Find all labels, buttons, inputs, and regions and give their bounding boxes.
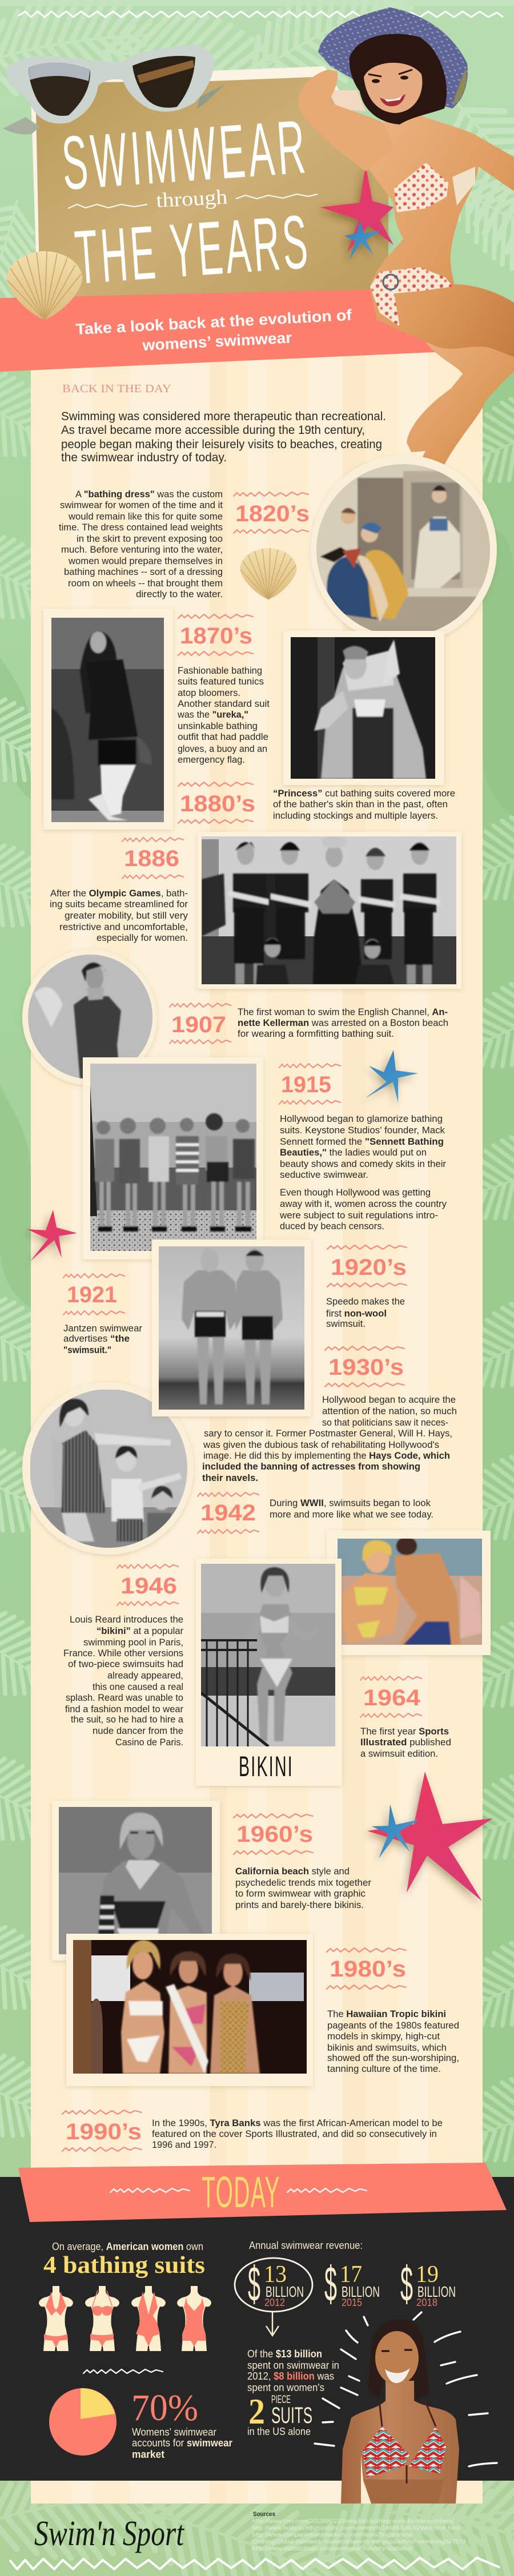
- text: 1870s: atop bloomers.: [178, 687, 240, 698]
- text: 1990s: 1996 and 1997.: [152, 2139, 216, 2150]
- icon: red starfish: [27, 1210, 77, 1261]
- text: 1980s: bikinis and swimsuits, which: [327, 2042, 447, 2053]
- stat: four bathing suits: [39, 2241, 211, 2351]
- year heading: 1942: 1942: [200, 1500, 256, 1526]
- top wavy line: [18, 11, 503, 17]
- year heading: 1960's: [234, 1814, 313, 1854]
- year heading: 1920's: 1920’s: [331, 1255, 407, 1280]
- text: 1886: especially for women.: [97, 932, 188, 943]
- intro paragraph: people began making their leisurely visits to beaches, creating: [61, 438, 382, 451]
- photo: 1886 Olympic swim team: [198, 832, 461, 989]
- year heading: 1907: 1907: [171, 1012, 226, 1037]
- text: 1820s: swimwear for women of the time and it: [60, 500, 223, 510]
- text: 1870s: outfit that had paddle: [178, 731, 268, 742]
- text: two-piece spending: 2012, $8 billion was: [247, 2370, 334, 2382]
- text: 1942: During WWII, swimsuits began to look: [270, 1498, 431, 1508]
- revenue 2018: 2018: [416, 2297, 437, 2308]
- text: 1930s: so that politicians saw it neces-: [322, 1417, 448, 1428]
- white wavy divider: [83, 2369, 163, 2373]
- text: 1820s: would remain like this for quite some: [68, 511, 223, 522]
- text: 1930s: included the banning of actresses from showing: [202, 1461, 420, 1472]
- revenue 2015: 17: [340, 2261, 362, 2288]
- text: 1960s: [235, 1866, 371, 1910]
- text: 1820s: [59, 489, 223, 599]
- year heading: 1870's: [178, 614, 253, 655]
- text: 1942: [270, 1498, 433, 1520]
- sources: http://www.companiesandmarkets.com/News/Textiles-and-: [252, 2531, 415, 2538]
- text: 1980s: pageants of the 1980s featured: [327, 2020, 459, 2031]
- text: 1820s: in the skirt to prevent exposing too: [77, 533, 223, 544]
- revenue 2018: [400, 2257, 456, 2312]
- text: 1915: Hollywood began to glamorize bathing: [280, 1113, 443, 1124]
- intro paragraph: [61, 410, 386, 464]
- text: 1880s: “Princess” cut bathing suits covered more: [273, 788, 455, 799]
- text: 1930s: attention of the nation, so much: [322, 1406, 457, 1416]
- year heading: 1980's: [327, 1948, 406, 1989]
- photo: princess cut suit: [283, 631, 444, 785]
- photo: 1980s Hawaiian Tropic pageant: [66, 1934, 313, 2086]
- year heading: 1921: [63, 1274, 125, 1315]
- revenue 2018: 19: [416, 2261, 439, 2288]
- text: 1820s: bathing machines -- sort of a dressing: [64, 566, 223, 577]
- text: 1946: France. While other versions: [63, 1648, 183, 1659]
- text: 1915: away with it, women across the country: [280, 1198, 447, 1209]
- year heading: 1990's: 1990’s: [66, 2119, 142, 2144]
- revenue 2012 with scribble circle: [235, 2257, 312, 2312]
- text: 1920s: Speedo makes the: [326, 1296, 405, 1307]
- revenue 2012 with scribble circle: $: [248, 2257, 260, 2312]
- year heading: 1880's: 1880’s: [180, 791, 255, 816]
- title: through: [155, 186, 228, 212]
- text: 1964: The first year Sports: [360, 1726, 449, 1737]
- photo: 1942 mother and children at beach: [22, 1382, 194, 1555]
- text: 1915: Even though Hollywood was getting: [280, 1187, 431, 1198]
- text: 1870s: [177, 665, 270, 765]
- photo: 1907 Annette Kellerman: [22, 949, 157, 1085]
- text: two-piece spending: 2: [248, 2391, 265, 2432]
- year heading: 1930's: 1930’s: [328, 1355, 404, 1380]
- year heading: 1942: [198, 1492, 259, 1533]
- photo: 1964 couple at beach: [327, 1531, 491, 1655]
- text: 1946: this one caused a real: [93, 1681, 183, 1692]
- revenue 2015: BILLION: [342, 2283, 380, 2300]
- section heading: back in the day: BACK IN THE DAY: [62, 383, 171, 395]
- text: 1946: already appeared,: [107, 1670, 183, 1681]
- text: 1946: Casino de Paris.: [115, 1737, 183, 1748]
- icon: bikini mannequin 1: [39, 2286, 73, 2351]
- text: 1820s: women would prepare themselves in: [68, 556, 223, 566]
- intro paragraph: As travel became more accessible during the 19th century,: [61, 424, 365, 437]
- text: 1920s: swimsuit.: [326, 1318, 366, 1329]
- sources: Clothing/Global-swimwear-market-driven-by-the-popularity-of-swimming/NI7579: [252, 2538, 465, 2545]
- icon: swimsuit mannequin 4: [177, 2286, 211, 2351]
- photo: 1915 Sennett Bathing Beauties: [83, 1057, 263, 1259]
- illustration: sun rays: [315, 2312, 497, 2466]
- text: 1886: After the Olympic Games, bath-: [50, 888, 188, 899]
- year heading: 1921: 1921: [67, 1282, 117, 1307]
- text: 1870s: emergency flag.: [178, 754, 245, 765]
- stat: 70%: accounts for swimwear: [132, 2437, 232, 2449]
- sources: [252, 2511, 465, 2552]
- text: 1980s: showed off the sun-worshiping,: [327, 2052, 459, 2063]
- revenue 2018: $: [400, 2257, 413, 2312]
- today ribbon: [18, 2163, 507, 2222]
- text: 1946: find a fashion model to wear: [65, 1704, 183, 1714]
- text: 1820s: room on wheels -- that brought them: [68, 578, 223, 589]
- stat: 70%: Womens' swimwear: [132, 2426, 216, 2438]
- photo: 1946 bikini: BIKINI: [239, 1750, 294, 1782]
- year heading: 1946: [117, 1564, 178, 1605]
- year heading: 1920's: [327, 1245, 407, 1287]
- text: 1921: Jantzen swimwear: [63, 1323, 142, 1334]
- photo: 1870s woman in bathing tunic: [43, 609, 173, 830]
- year heading: 1880's: [178, 782, 255, 823]
- icon: sunglasses: [3, 45, 224, 135]
- revenue 2012 with scribble circle: BILLION: [266, 2283, 304, 2300]
- text: 1915: suits. Keystone Studios' founder, Mack: [280, 1125, 445, 1136]
- panel: kraft paper title card: [30, 66, 388, 308]
- photo: 1946 bikini: [196, 1559, 342, 1786]
- coral header ribbon: [0, 288, 445, 372]
- year heading: 1930's: [325, 1346, 404, 1387]
- text: 1920s: first non-wool: [326, 1308, 387, 1319]
- text: 1886: greater mobility, but still very: [65, 910, 188, 921]
- stat: annual swimwear revenue: Annual swimwear revenue:: [249, 2240, 363, 2251]
- text: 1907: nette Kellerman was arrested on a Boston beach: [238, 1017, 448, 1028]
- text: 1886: ing suits became streamlined for: [50, 899, 188, 909]
- photo: 1820s bathing machine illustration: [311, 455, 497, 645]
- year heading: 1886: 1886: [124, 846, 179, 871]
- text: 1921: [63, 1323, 142, 1355]
- bottom wavy line: [10, 2558, 500, 2569]
- stat: four bathing suits: On average, American women own: [52, 2241, 203, 2252]
- icon: blue starfish: [365, 1050, 418, 1102]
- text: 1820s: directly to the water.: [136, 589, 223, 599]
- icon: swimsuit mannequin 3: [131, 2286, 166, 2351]
- text: 1946: [63, 1614, 184, 1748]
- text: two-piece spending: in the US alone: [247, 2426, 311, 2437]
- text: two-piece spending: spent on swimwear in: [247, 2360, 339, 2371]
- stat: 70%: 70%: [131, 2387, 198, 2429]
- text: 1946: splash. Reard was unable to: [66, 1692, 183, 1703]
- revenue 2015: [324, 2257, 380, 2312]
- text: 1960s: prints and barely-there bikinis.: [235, 1899, 364, 1910]
- icon: scallop shell: [7, 251, 82, 320]
- arrow: from 2012 figure down: [266, 2312, 279, 2336]
- text: 1915: duced by beach censors.: [280, 1221, 384, 1231]
- icon: shell: [240, 548, 297, 599]
- text: 1960s: California beach style and: [235, 1866, 350, 1877]
- text: two-piece spending: PIECE: [271, 2394, 291, 2406]
- subtitle: Take a look back at the evolution of: [75, 307, 353, 338]
- panel: dark today section: [0, 2177, 514, 2481]
- year heading: 1870's: 1870’s: [180, 623, 252, 649]
- revenue 2018: BILLION: [417, 2283, 456, 2300]
- revenue 2015: 2015: [342, 2297, 362, 2308]
- text: 1942: more and more like what we see today.: [270, 1509, 433, 1520]
- text: 1870s: suits featured tunics: [178, 676, 264, 687]
- text: 1930s: was given the dubious task of rehabilitating Hollywood's: [203, 1439, 439, 1450]
- year heading: 1964: 1964: [363, 1685, 421, 1710]
- photo: 1960s model with body paint: [52, 1801, 220, 1961]
- icon: large red and blue starfish: [367, 1772, 493, 1901]
- text: 1946: the suit, so he had to hire a: [71, 1714, 184, 1725]
- photo: smiling woman in zigzag bikini: [341, 2320, 459, 2503]
- text: 1990s: In the 1990s, Tyra Banks was the first African-American model to be: [152, 2118, 443, 2128]
- text: 1946: “bikini” at a popular: [97, 1625, 183, 1636]
- text: 1870s: Another standard suit: [178, 698, 270, 709]
- text: 1870s: was the "ureka,": [177, 709, 248, 720]
- title: [59, 104, 318, 300]
- text: 1880s: of the bather's skin than in the past, often: [273, 799, 448, 810]
- text: two-piece spending: spent on women's: [247, 2382, 324, 2393]
- intro paragraph: the swimwear industry of today.: [61, 451, 227, 464]
- text: 1870s: unsinkable bathing: [178, 721, 258, 731]
- sources: http://www.cnn.com/2013/06/21/living/btn-bathing-suits-by-the-numbers/: [252, 2518, 454, 2525]
- panel: cream striped column: [31, 348, 483, 2503]
- today ribbon: TODAY: [202, 2168, 280, 2217]
- revenue 2015: $: [324, 2257, 337, 2312]
- year heading: 1980's: 1980’s: [330, 1957, 406, 1982]
- illustration: pin-up girl in bikini and sun hat: [298, 7, 514, 468]
- text: 1915: Sennett formed the "Sennett Bathing: [280, 1136, 444, 1147]
- text: 1964: a swimsuit edition.: [360, 1748, 438, 1759]
- text: 1930s: their navels.: [202, 1472, 258, 1483]
- logo: Swim'n Sport: Swim'n Sport: [34, 2514, 184, 2553]
- sources: http://www.hudson.edu/custom_users/mmtech/14685/14685/Welcome.html: [252, 2525, 460, 2531]
- year heading: 1915: 1915: [281, 1072, 331, 1097]
- text: 1990s: [152, 2118, 443, 2150]
- year heading: 1915: [279, 1064, 340, 1104]
- text: 1915: beauty shows and comedy skits in their: [280, 1158, 446, 1169]
- stat: 70%: market: [132, 2449, 164, 2460]
- text: 1930s: Hollywood began to acquire the: [322, 1394, 456, 1405]
- text: 1820s: A "bathing dress" was the custom: [75, 489, 223, 500]
- text: 1870s: gloves, a buoy and an: [178, 743, 267, 754]
- photo: 1920s two men in swim trunks: [152, 1239, 311, 1416]
- text: 1930s: sary to censor it. Former Postmaster General, Will H. Hays,: [204, 1428, 452, 1439]
- revenue 2012 with scribble circle: 2012: [264, 2297, 285, 2308]
- text: 1980s: tanning culture of the time.: [327, 2063, 441, 2074]
- text: two-piece spending: [247, 2348, 339, 2437]
- year heading: 1960's: 1960’s: [236, 1822, 313, 1847]
- stat: four bathing suits: 4 bathing suits: [43, 2252, 205, 2279]
- intro paragraph: Swimming was considered more therapeutic than recreational.: [61, 410, 386, 423]
- text: 1964: [360, 1726, 451, 1759]
- year heading: 1820's: 1820’s: [235, 501, 310, 526]
- text: 1907: [238, 1007, 448, 1039]
- text: 1946: Louis Reard introduces the: [70, 1614, 183, 1625]
- year heading: 1946: 1946: [121, 1573, 177, 1599]
- year heading: 1990's: [62, 2110, 142, 2151]
- sources: http://www.statisticbrain.com/swimwear-industry-statistics/: [252, 2545, 413, 2552]
- text: 1946: swimming pool in Paris,: [83, 1637, 183, 1648]
- stat: 70%: [131, 2387, 232, 2460]
- text: 1870s: Fashionable bathing: [178, 665, 262, 676]
- year heading: 1964: [360, 1676, 421, 1717]
- text: 1960s: psychedelic trends mix together: [235, 1877, 371, 1888]
- text: 1946: of two-piece swimsuits had: [68, 1659, 183, 1669]
- year heading: 1886: [122, 838, 183, 879]
- subtitle: womens’ swimwear: [142, 329, 292, 354]
- text: 1920s: [326, 1296, 405, 1329]
- text: 1921: "swimsuit.": [63, 1345, 111, 1355]
- text: 1980s: The Hawaiian Tropic bikini: [327, 2009, 446, 2019]
- text: 1907: The first woman to swim the English Channel, An-: [238, 1007, 448, 1017]
- subtitle: [75, 307, 353, 354]
- pie chart: 70%: [49, 2388, 117, 2456]
- text: 1915: [279, 1113, 447, 1231]
- text: 1820s: much. Before venturing into the water,: [61, 544, 223, 555]
- year heading: 1907: [170, 1003, 231, 1044]
- sources: Sources: [253, 2511, 275, 2518]
- text: 1886: [50, 888, 188, 943]
- text: 1964: Illustrated published: [360, 1737, 451, 1748]
- text: 1880s: including stockings and multiple layers.: [273, 810, 438, 821]
- text: 1930s: image. He did this by implementing the Hays Code, which: [203, 1450, 450, 1461]
- text: 1820s: time. The dress contained lead weights: [59, 522, 223, 533]
- text: 1880s: [273, 788, 455, 821]
- text: 1980s: models in skimpy, high-cut: [327, 2031, 440, 2042]
- text: 1915: Beauties," the ladies would put on: [280, 1147, 427, 1158]
- revenue 2012 with scribble circle: 13: [264, 2261, 287, 2288]
- text: 1907: for wearing a formfitting bathing suit.: [238, 1028, 394, 1039]
- text: 1886: restrictive and uncomfortable,: [59, 921, 188, 932]
- text: two-piece spending: Of the $13 billion: [247, 2348, 322, 2360]
- text: 1960s: to form swimwear with graphic: [235, 1888, 366, 1899]
- text: 1930s: [202, 1394, 457, 1483]
- text: 1990s: featured on the cover Sports Illustrated, and did so consecutively in: [152, 2128, 437, 2139]
- text: 1921: advertises “the: [63, 1333, 130, 1344]
- year heading: 1820's: [234, 492, 310, 533]
- text: 1980s: [327, 2009, 459, 2074]
- icon: bikini mannequin 2: [85, 2286, 119, 2351]
- stat: annual swimwear revenue: [235, 2240, 456, 2336]
- text: 1915: seductive swimwear.: [280, 1169, 368, 1180]
- text: two-piece spending: SUITS: [271, 2403, 312, 2428]
- text: 1946: nude dancer from the: [93, 1725, 183, 1736]
- icon: red starfish and blue starfish: [320, 164, 393, 260]
- text: 1915: were subject to suit regulations intro-: [279, 1210, 438, 1221]
